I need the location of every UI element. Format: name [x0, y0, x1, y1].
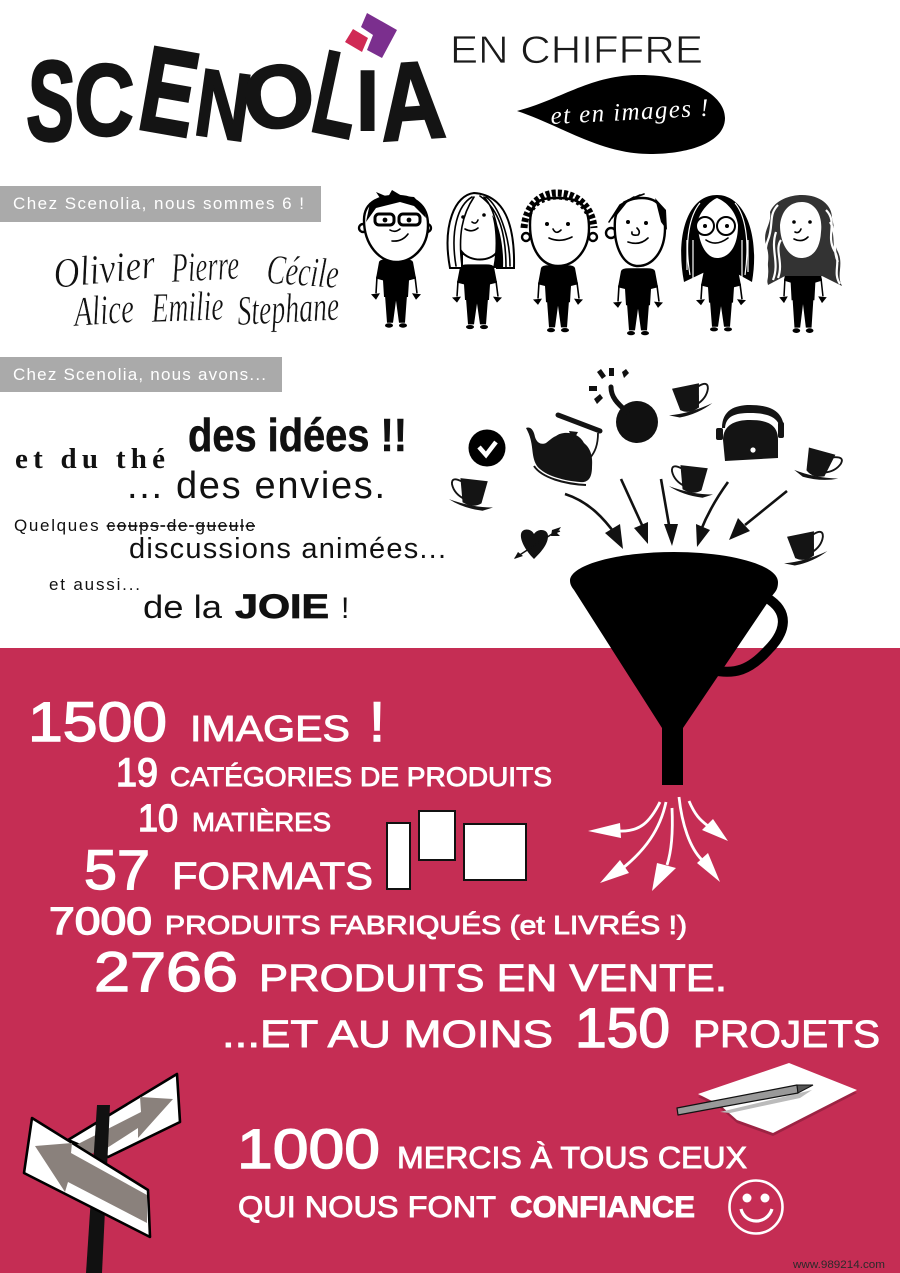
text: de la joie: [143, 588, 349, 626]
text: de la joie: JOIE: [235, 588, 329, 626]
text: quelques coups de gueule: Quelques coups de gueule: [14, 516, 255, 535]
handwritten names: Alice: [70, 286, 136, 336]
icon: signpost: [24, 1074, 180, 1273]
character: Cécile: [522, 193, 597, 332]
heading: en chiffre: EN CHIFFRE: [450, 29, 703, 72]
handwritten names: Stephane: [236, 284, 340, 335]
stat: 150 projets: PROJETS: [693, 1014, 880, 1056]
stat: 1500 images: IMAGES: [190, 708, 350, 749]
stat: 150 projets: 150: [575, 996, 670, 1059]
handwritten names: Olivier: [51, 241, 158, 298]
stat: 19 catégories: CATÉGORIES DE PRODUITS: [170, 762, 552, 792]
text block: ideas list: [14, 409, 446, 626]
stat: 10 matières: 10: [138, 798, 178, 840]
stat: 150 projets: [222, 996, 880, 1059]
icon: smiley: [730, 1180, 782, 1234]
handwritten names: Cécile: [265, 247, 340, 298]
logo: Scenolia: C: [72, 42, 136, 158]
stat: 57 formats: FORMATS: [172, 856, 373, 898]
logo: Scenolia: L: [303, 24, 373, 164]
text: qui nous font confiance: CONFIANCE: [510, 1191, 695, 1224]
logo: Scenolia: O: [235, 42, 322, 152]
stat: 1000 mercis: MERCIS À TOUS CEUX: [397, 1140, 747, 1175]
text: et aussi: et aussi...: [49, 575, 140, 594]
arrows out of funnel: [588, 797, 728, 891]
stat: 7000 produits: PRODUITS FABRIQUÉS (et LIVRÉS !): [165, 910, 687, 940]
stat: 19 catégories: 19: [116, 751, 158, 795]
icon: check badge: [468, 430, 506, 466]
stat: 10 matières: MATIÈRES: [192, 807, 331, 837]
logo: Scenolia: S: [24, 37, 78, 167]
character: Stephane: [765, 195, 842, 333]
stat: 57 formats: [84, 838, 373, 901]
icon: format rectangles: [387, 811, 526, 889]
stat: 1500 images: [28, 690, 385, 753]
logo: Scenolia: A: [375, 38, 449, 165]
icon: heart with arrow: [514, 527, 561, 559]
stat: 1500 images: !: [369, 690, 385, 753]
stat: 1500 images: 1500: [28, 690, 167, 753]
text: des idées: des idées !!: [188, 409, 407, 461]
speech bubble: et en images: [517, 75, 725, 154]
logo: Scenolia: I: [356, 53, 379, 148]
label bar: nous sommes 6: [0, 186, 321, 222]
stat: 2766 produits en vente: [94, 940, 727, 1003]
label bar: nous avons: Chez Scenolia, nous avons...: [13, 365, 266, 384]
logo: Scenolia: [24, 13, 449, 167]
speech bubble: et en images: et en images !: [550, 95, 709, 130]
icon: cup top: [667, 382, 713, 418]
icon: toaster: [716, 405, 784, 461]
handwritten names: [51, 241, 340, 336]
icon: funnel with handle: [570, 552, 783, 785]
stat: 150 projets: ...ET AU MOINS: [222, 1014, 553, 1056]
icon: paper and pencil: [677, 1063, 857, 1136]
text: de la joie: de la: [143, 589, 222, 625]
stat: 10 matières: [138, 798, 331, 840]
stat: 7000 produits: [49, 901, 687, 943]
stat: 19 catégories: [116, 751, 552, 795]
stat: 1000 mercis: 1000: [237, 1117, 380, 1180]
label bar: nous avons: [0, 357, 282, 392]
character: Olivier: [359, 190, 431, 328]
logo: Scenolia: E: [131, 20, 208, 163]
character: Alice: [448, 193, 514, 329]
handwritten names: Pierre: [169, 242, 240, 292]
icon: cup lower right: [782, 530, 828, 566]
icon: cup left: [449, 478, 493, 511]
text: des envies: ... des envies.: [127, 465, 385, 507]
character: Emilie: [681, 195, 754, 331]
text: discussions animées: discussions animées...: [129, 533, 446, 565]
text: de la joie: !: [341, 592, 349, 625]
icon: cup right tilted: [793, 443, 846, 489]
text: qui nous font confiance: [238, 1191, 695, 1224]
text: et du thé: et du thé: [15, 443, 165, 475]
label bar: nous sommes 6: Chez Scenolia, nous sommes 6 !: [13, 194, 304, 213]
watermark: www.989214.com: [792, 1259, 885, 1271]
characters: team of six: [359, 190, 842, 335]
icon: cup centre: [669, 465, 713, 498]
arrows into funnel: [565, 479, 787, 549]
handwritten names: Emilie: [150, 284, 224, 332]
character: Pierre: [606, 194, 667, 335]
icon: bomb: [589, 368, 658, 443]
stat: 1000 mercis: [237, 1117, 747, 1180]
stats list: [28, 690, 880, 1224]
logo: Scenolia: N: [189, 49, 257, 162]
icon: kettle: [526, 415, 600, 485]
icon: logo squares: [345, 13, 397, 58]
pink background panel: [0, 648, 900, 1273]
stat: 2766 produits en vente: PRODUITS EN VENTE.: [259, 958, 727, 1000]
text: qui nous font confiance: QUI NOUS FONT: [238, 1191, 496, 1224]
stat: 7000 produits: 7000: [49, 901, 152, 943]
stat: 2766 produits en vente: 2766: [94, 940, 238, 1003]
stat: 57 formats: 57: [84, 838, 150, 901]
